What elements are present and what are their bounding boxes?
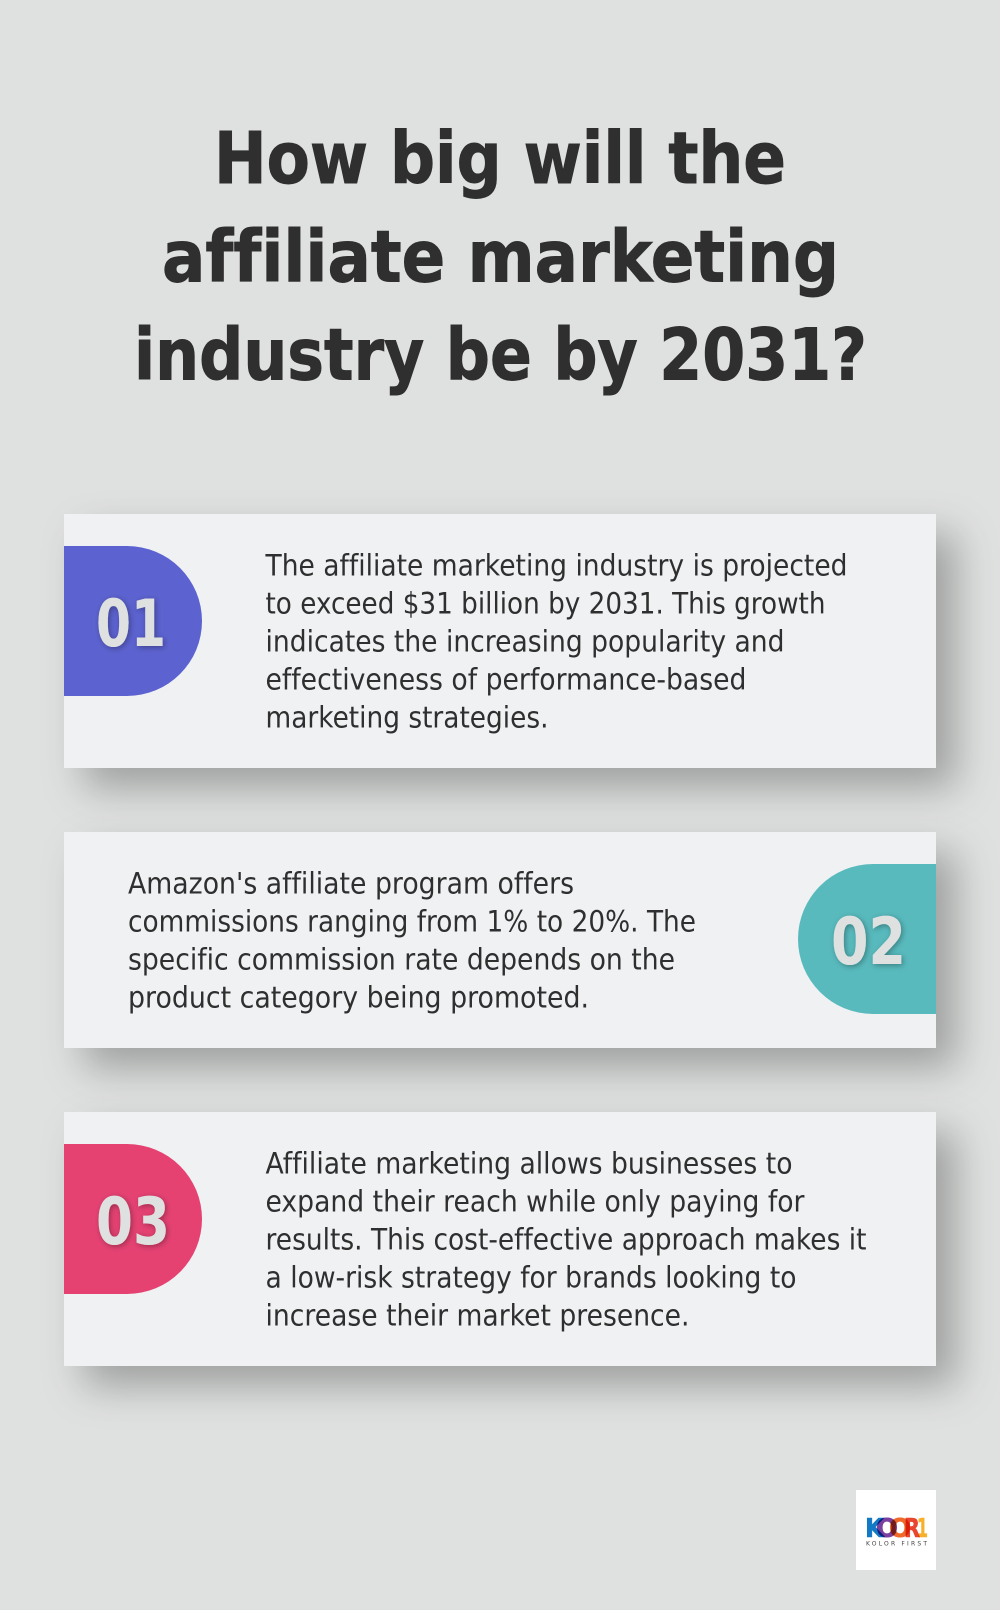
logo: KOOR1 Kolor First: KOLOR FIRST xyxy=(866,1540,927,1548)
logo: KOOR1 Kolor First: 1 xyxy=(917,1514,928,1544)
text block: step 01: The affiliate marketing industry is projected xyxy=(265,549,847,583)
badge: 03 xyxy=(64,1144,202,1294)
logo: KOOR1 Kolor First xyxy=(856,1490,936,1570)
text block: step 03: expand their reach while only paying for xyxy=(266,1185,805,1219)
badge: 02: 02 xyxy=(831,905,906,980)
title: How big will the xyxy=(214,117,786,200)
badge: 03: 03 xyxy=(96,1185,170,1260)
text block: step 03: Affiliate marketing allows businesses to xyxy=(266,1147,792,1181)
text block: step 02 xyxy=(128,867,696,1015)
text block: step 02: Amazon's affiliate program offers xyxy=(128,867,574,901)
badge: 01: 01 xyxy=(96,587,166,662)
text block: step 01 xyxy=(265,549,847,735)
text block: step 01: marketing strategies. xyxy=(266,701,548,735)
title: industry be by 2031? xyxy=(134,314,867,396)
badge: 02 xyxy=(798,864,936,1014)
logo: KOOR1 Kolor First: K xyxy=(865,1514,885,1544)
text block: step 03 xyxy=(266,1147,866,1333)
title: affiliate marketing xyxy=(162,216,839,298)
text block: step 01: effectiveness of performance-based xyxy=(266,663,746,697)
text block: step 02: commissions ranging from 1% to 20%. The xyxy=(128,905,696,939)
title xyxy=(134,117,867,396)
text block: step 01: indicates the increasing popularity and xyxy=(266,625,784,659)
logo: KOOR1 Kolor First: R xyxy=(904,1514,920,1544)
panel: step 03 xyxy=(64,1112,936,1366)
logo: KOOR1 Kolor First: O xyxy=(889,1514,911,1544)
text block: step 03: results. This cost-effective approach makes it xyxy=(266,1223,866,1257)
logo: KOOR1 Kolor First: O xyxy=(876,1514,898,1544)
text block: step 01: to exceed $31 billion by 2031. This growth xyxy=(266,587,826,621)
panel: step 02 xyxy=(64,832,936,1048)
text block: step 03: increase their market presence. xyxy=(266,1299,690,1333)
panel: step 01 xyxy=(64,514,936,768)
text block: step 03: a low-risk strategy for brands looking to xyxy=(266,1261,796,1295)
text block: step 02: specific commission rate depends on the xyxy=(128,943,675,977)
text block: step 02: product category being promoted. xyxy=(128,981,589,1015)
badge: 01 xyxy=(64,546,202,696)
